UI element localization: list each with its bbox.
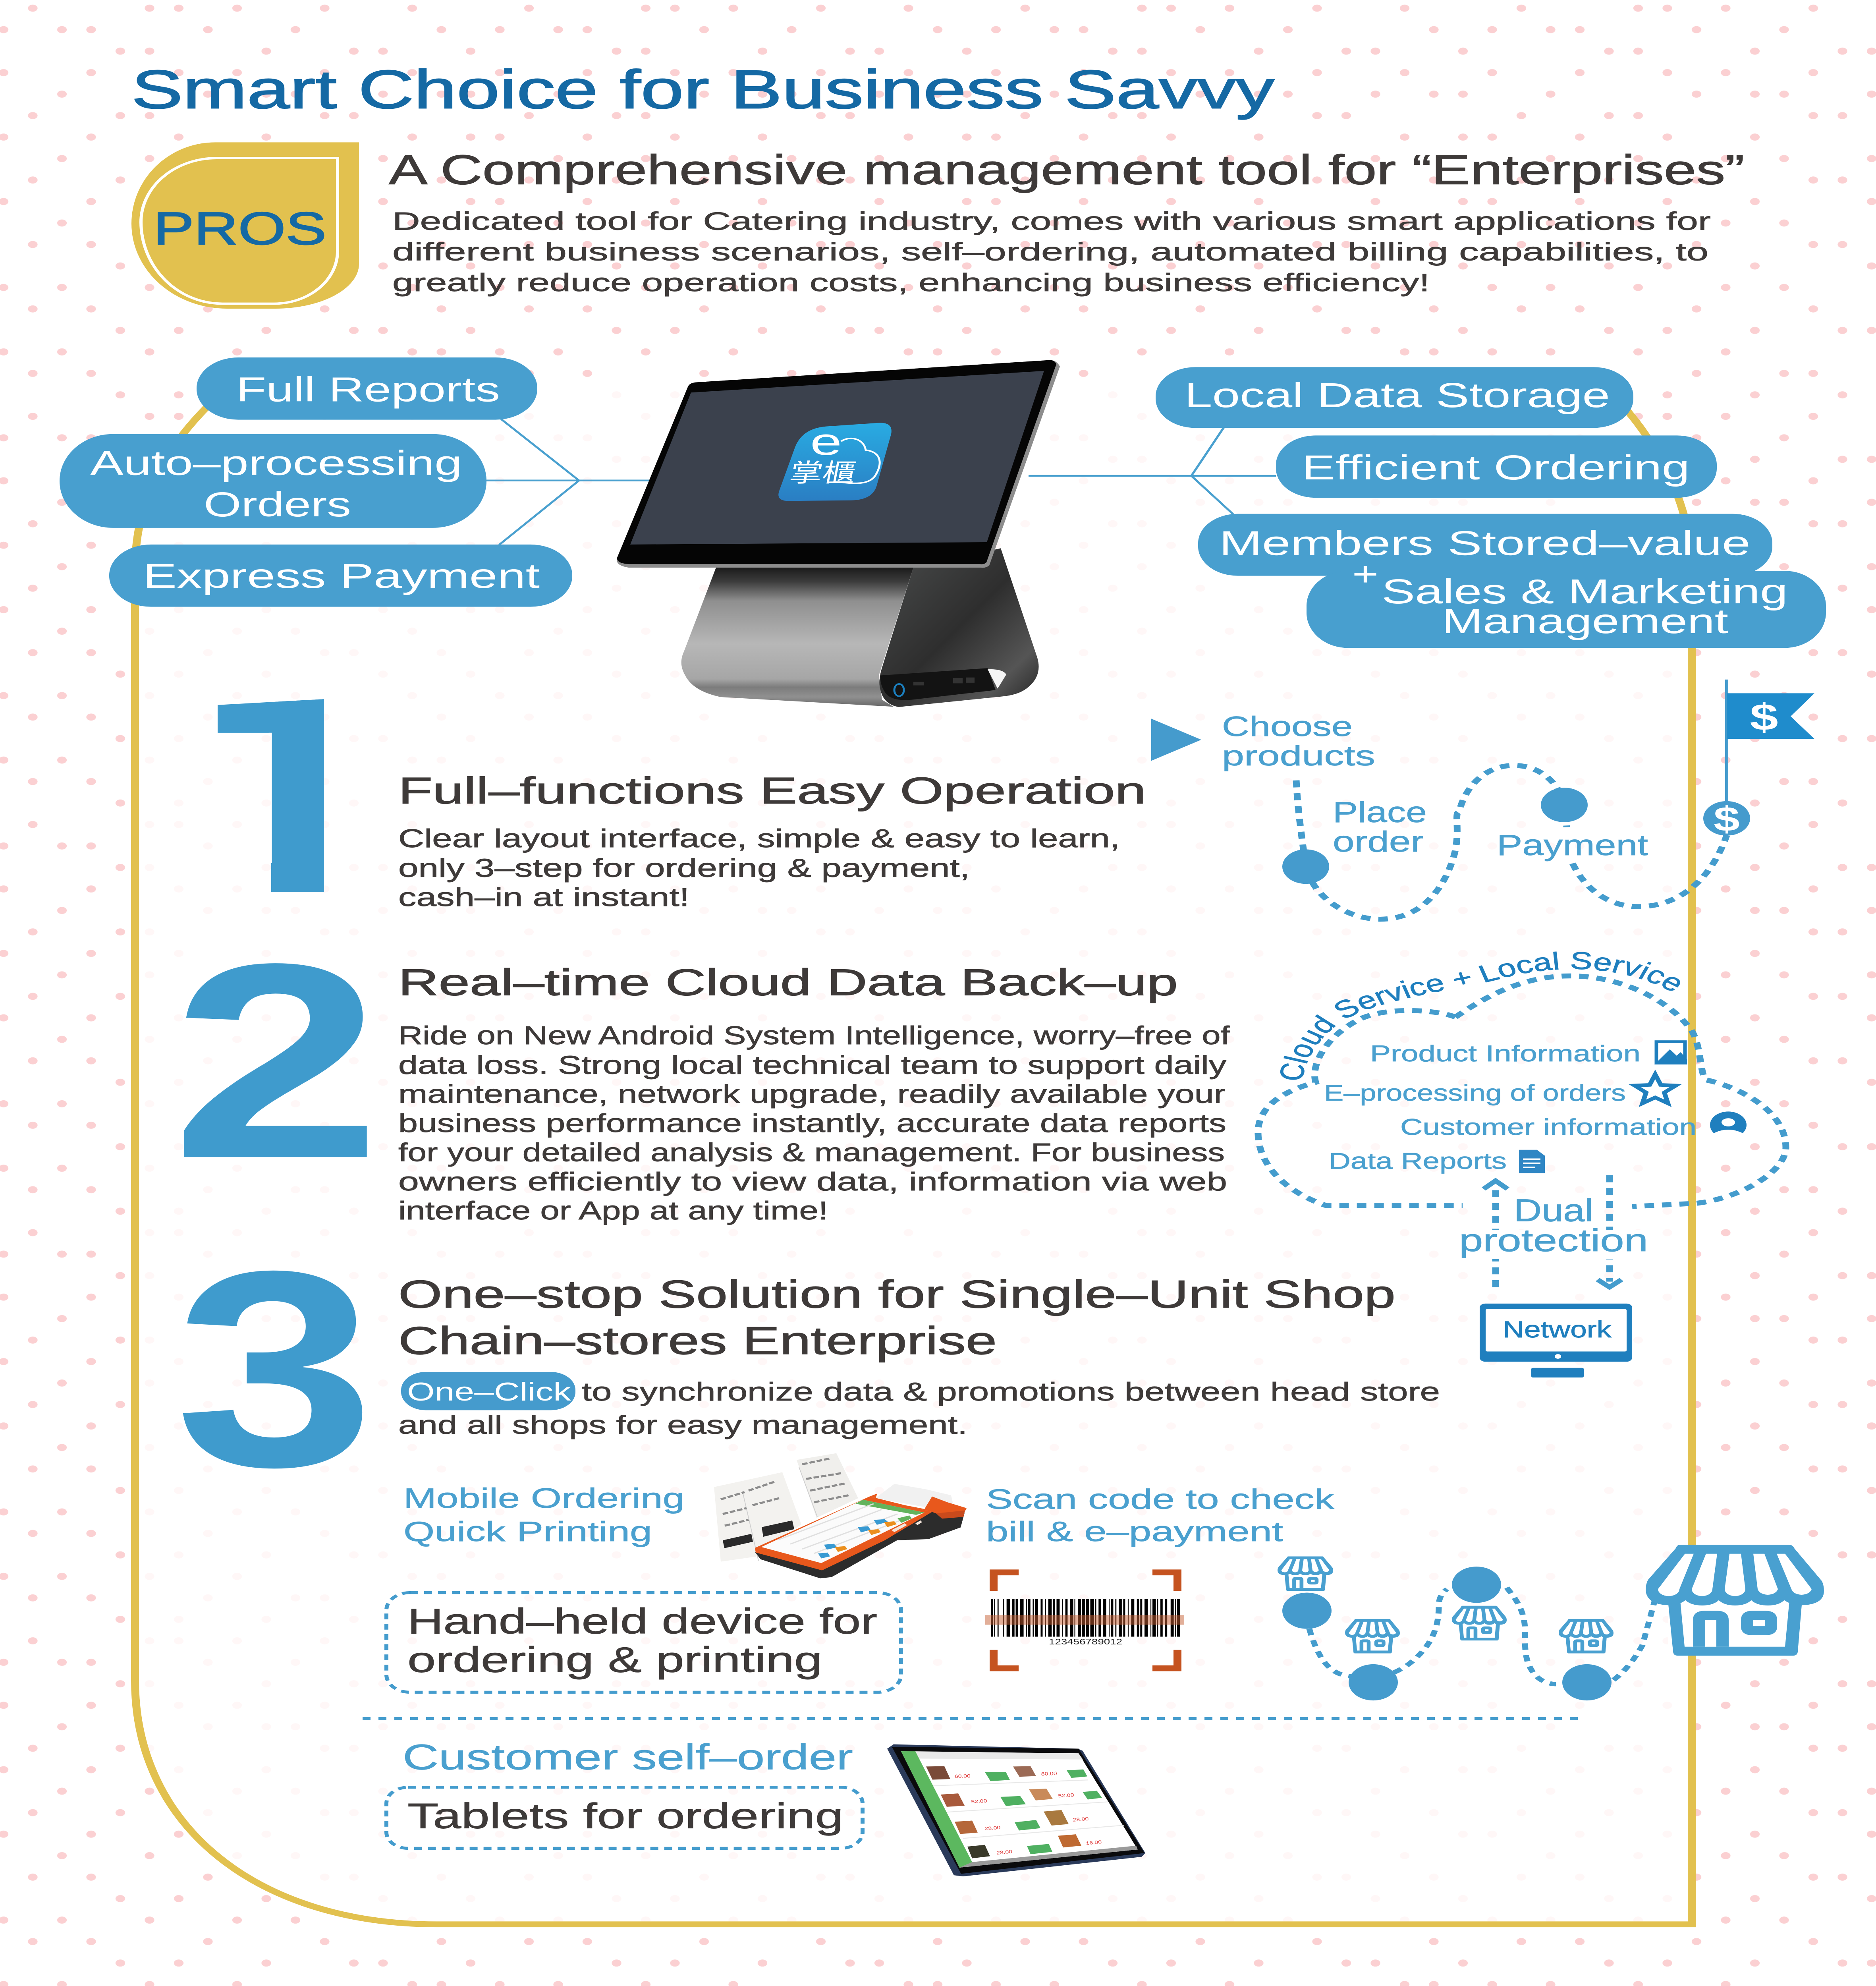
- tag: One-Click: One–Click: [407, 1377, 571, 1406]
- pill: Full Reports: [197, 357, 537, 420]
- section 3 body: to synchronize data & promotions between head store: [582, 1377, 1440, 1406]
- callout: tablets for ordering: [386, 1787, 863, 1848]
- icon: small shop 1: [1278, 1556, 1333, 1591]
- illustration: ordering tablet: 28.00: [996, 1849, 1013, 1855]
- arched label: cloud service + local service: [1302, 969, 1678, 1082]
- icon: small shop 4: [1559, 1619, 1614, 1654]
- intro paragraph: different business scenarios, self–ordering, automated billing capabilities, to: [392, 238, 1708, 266]
- section 1 body: only 3–step for ordering & payment,: [398, 854, 970, 883]
- arrow: download dashed: [1598, 1175, 1621, 1287]
- label: place order: order: [1333, 825, 1424, 858]
- icon: dollar flag: $: [1714, 800, 1740, 838]
- label: mobile ordering quick printing: [403, 1482, 685, 1547]
- label: scan code to check bill: Scan code to check: [986, 1484, 1335, 1515]
- pill: Members Stored-value: Members Stored–value: [1219, 524, 1751, 562]
- illustration: handheld POS with receipts: [714, 1453, 967, 1578]
- pill: Full Reports: Full Reports: [236, 370, 500, 409]
- device screen: [761, 1500, 924, 1563]
- section 3 heading: One–stop Solution for Single–Unit Shop: [398, 1272, 1395, 1316]
- icon: small shop 3: [1452, 1606, 1507, 1640]
- label: dual protection: protection: [1459, 1223, 1648, 1258]
- pill: Sales and Marketing Management: Management: [1442, 602, 1728, 640]
- title: Smart Choice for Business Savvy: [131, 59, 1274, 120]
- list item: product information: Product Information: [1370, 1041, 1641, 1066]
- intro paragraph: [392, 207, 1711, 296]
- illustration: POS terminal with app logo: [617, 360, 1060, 707]
- callout: hand-held device: ordering & printing: [407, 1640, 822, 1680]
- icon: network monitor: Network: [1503, 1316, 1612, 1343]
- diagram: chain store network: [1278, 1556, 1655, 1700]
- label: place order: [1333, 796, 1427, 858]
- list item: data reports: Data Reports: [1329, 1148, 1507, 1174]
- intro paragraph: greatly reduce operation costs, enhancing business efficiency!: [392, 269, 1430, 296]
- list item: customer information: Customer information: [1400, 1114, 1697, 1140]
- pill: Auto-processing Orders: Orders: [204, 485, 351, 524]
- label: mobile ordering quick printing: Quick Printing: [403, 1516, 652, 1547]
- badge: PROS: [131, 142, 359, 309]
- icon: barcode scanner: 123456789012: [1049, 1637, 1122, 1646]
- receipts: [714, 1453, 858, 1562]
- illustration: ordering tablet: 60.00: [954, 1773, 971, 1779]
- section 3 body: and all shops for easy management.: [398, 1410, 967, 1439]
- section 1 body: cash–in at instant!: [398, 883, 689, 912]
- icon: app logo: e: [810, 421, 842, 463]
- icon: dollar flag: $: [1750, 696, 1778, 738]
- pill: Express Payment: Express Payment: [143, 556, 540, 595]
- section 2 body: interface or App at any time!: [398, 1196, 828, 1225]
- list item: e-processing of orders: E–processing of orders: [1324, 1080, 1626, 1106]
- arrow: upload dashed: [1484, 1181, 1507, 1287]
- intro paragraph: Dedicated tool for Catering industry, comes with various smart applications for: [392, 207, 1711, 235]
- label: mobile ordering quick printing: Mobile Ordering: [403, 1482, 685, 1514]
- section 2 heading: Real–time Cloud Data Back–up: [398, 961, 1178, 1003]
- pill: Local Data Storage: Local Data Storage: [1185, 376, 1610, 414]
- badge: PROS: PROS: [153, 203, 326, 254]
- diagram: cloud and network dual protection: [1258, 947, 1786, 1377]
- diagram: three-step ordering path: [1151, 680, 1814, 919]
- icon: small shop 2: [1345, 1619, 1400, 1654]
- pill: Auto-processing Orders: [60, 434, 486, 528]
- callout: hand-held device: Hand–held device for: [407, 1601, 877, 1641]
- label: choose products: [1222, 711, 1375, 771]
- pill: Sales and Marketing Management: Sales & Marketing: [1382, 572, 1788, 610]
- illustration: ordering tablet: 28.00: [984, 1825, 1001, 1831]
- illustration: ordering tablet: 16.00: [1085, 1839, 1102, 1846]
- section 2 body: owners efficiently to view data, information via web: [398, 1167, 1227, 1196]
- icon: barcode scanner: [985, 1569, 1184, 1671]
- divider: [363, 1716, 1583, 1721]
- section 3 heading: [398, 1272, 1395, 1362]
- connector lines: right features: [1029, 428, 1276, 514]
- section 2 body: maintenance, network upgrade, readily available your: [398, 1080, 1226, 1109]
- subtitle: A Comprehensive management tool for “Enterprises”: [389, 146, 1745, 193]
- label: choose products: products: [1222, 740, 1375, 771]
- callout: tablets for ordering: Tablets for ordering: [407, 1796, 843, 1836]
- label: choose products: Choose: [1222, 711, 1353, 742]
- dashed cloud outline: [1258, 976, 1786, 1207]
- section 2 body: business performance instantly, accurate data reports: [398, 1109, 1226, 1138]
- tag: One-Click: [401, 1372, 575, 1410]
- label: dual protection: [1457, 1193, 1650, 1259]
- pill: Efficient Ordering: Efficient Ordering: [1302, 448, 1690, 487]
- section 2 body: Ride on New Android System Intelligence, worry–free of: [398, 1021, 1230, 1050]
- icon: app logo: 掌櫃: [787, 459, 858, 487]
- pill: Auto-processing Orders: Auto–processing: [90, 444, 462, 482]
- pill: Efficient Ordering: [1276, 435, 1717, 498]
- illustration: ordering tablet: 52.00: [1058, 1792, 1074, 1799]
- icon: start triangle: [1151, 719, 1201, 761]
- illustration: ordering tablet: 28.00: [1072, 1816, 1089, 1822]
- numeral 1: [218, 699, 324, 892]
- section 3 body: [398, 1377, 1440, 1439]
- numeral 2: 2: [171, 906, 382, 1216]
- pill: Sales and Marketing Management: [1307, 555, 1826, 648]
- dashed route: [1309, 1588, 1655, 1684]
- section 2 body: data loss. Strong local technical team to support daily: [398, 1051, 1226, 1080]
- device body: [755, 1511, 965, 1578]
- icon: dollar flag: [1703, 680, 1814, 838]
- numeral 1: 1: [179, 638, 400, 951]
- pill: Local Data Storage: [1156, 367, 1633, 428]
- section 1 heading: Full–functions Easy Operation: [398, 769, 1146, 811]
- connector lines: left features: [486, 419, 675, 545]
- illustration: ordering tablet: [887, 1744, 1145, 1876]
- icon: large storefront: [1646, 1545, 1824, 1656]
- section 3 heading: Chain–stores Enterprise: [398, 1319, 997, 1362]
- label: customer self-order: Customer self–order: [403, 1737, 853, 1777]
- section 2 body: for your detailed analysis & management. For business: [398, 1138, 1225, 1167]
- label: payment: Payment: [1497, 829, 1648, 862]
- illustration: ordering tablet: 80.00: [1041, 1771, 1057, 1777]
- callout: hand-held device: [386, 1593, 901, 1692]
- diagram: cloud and network dual protection: Cloud Service + Local Service: [1272, 947, 1691, 1083]
- section 1 body: [398, 824, 1120, 912]
- pill: Members Stored-value: [1198, 514, 1772, 576]
- dotted route: [1296, 765, 1727, 919]
- label: dual protection: Dual: [1514, 1193, 1593, 1228]
- icon: app logo: [778, 421, 892, 501]
- pill: Sales and Marketing Management: +: [1352, 555, 1378, 593]
- illustration: ordering tablet: 52.00: [971, 1798, 987, 1804]
- panel: main yellow-bordered content frame: [135, 383, 1692, 1924]
- label: scan code to check bill: [986, 1484, 1335, 1547]
- label: scan code to check bill: bill & e–payment: [986, 1516, 1283, 1547]
- step markers: [1282, 849, 1329, 884]
- pill: Express Payment: [109, 545, 572, 607]
- section 2 body: [398, 1021, 1230, 1225]
- section 1 body: Clear layout interface, simple & easy to learn,: [398, 824, 1120, 853]
- route markers: [1282, 1567, 1612, 1700]
- label: place order: Place: [1333, 796, 1427, 829]
- numeral 3: 3: [175, 1213, 375, 1525]
- icon: network monitor: [1480, 1304, 1632, 1377]
